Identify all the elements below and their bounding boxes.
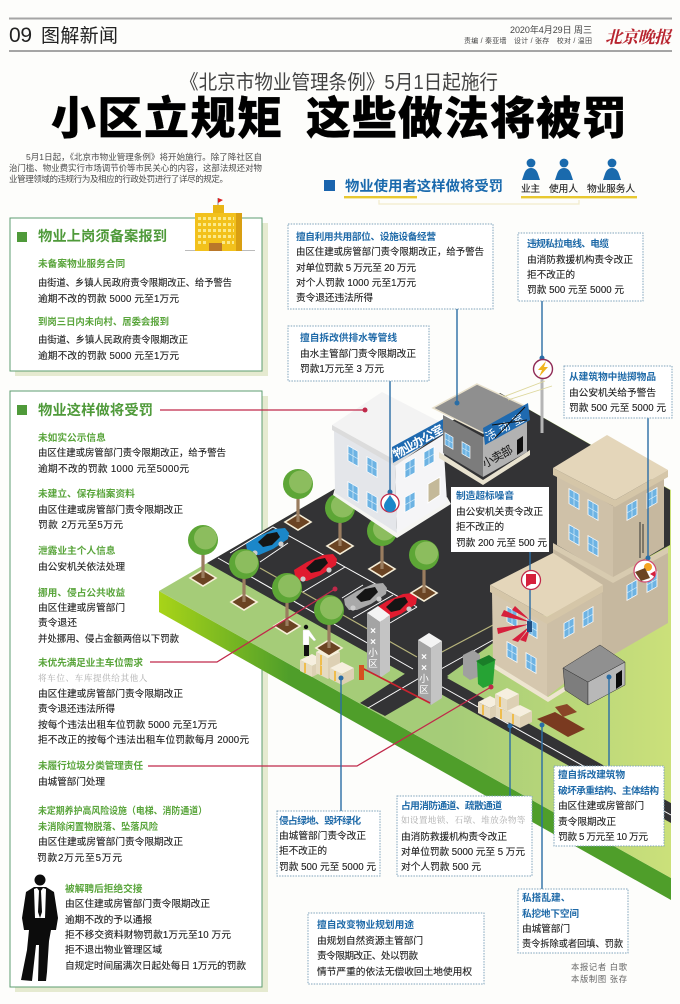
panel: property penalties: 责令退还违法所得 (38, 702, 115, 715)
date and editors: 2020年4月29日 周三 (510, 24, 592, 35)
panel: property penalties: 未建立、保存档案资料 (38, 487, 135, 500)
panel: property penalties: 泄露业主个人信息 (38, 544, 116, 557)
callout: fire lanes: 对个人罚款 500 元 (401, 860, 481, 873)
callout: shared areas (288, 224, 493, 309)
panel: property penalties: 拒不退出物业管理区域 (65, 943, 162, 956)
callout: green space: 由城管部门责令改正 (279, 829, 366, 842)
callout: thrown objects: 从建筑物中抛掷物品 (569, 370, 656, 383)
callout: shared areas: 责令退还违法所得 (296, 291, 373, 304)
callout: shared areas: 对单位罚款 5 万元至 20 万元 (296, 261, 416, 274)
callout: structural changes: 擅自拆改建筑物 (558, 768, 625, 781)
gate pillar right: 小 (419, 674, 429, 685)
utility pole and wires (503, 378, 552, 433)
callout: thrown objects: 由公安机关给予警告 (569, 386, 656, 399)
intro paragraph: 5月1日起，《北京市物业管理条例》将开始施行。除了降社区自 (26, 152, 262, 162)
main title (51, 93, 627, 144)
callout: thrown objects: 罚款 500 元至 5000 元 (569, 401, 666, 414)
callout: water pipes: 罚款1万元至 3 万元 (300, 362, 384, 375)
isometric community scene (159, 378, 671, 900)
callout: green space: 罚款 500 元至 5000 元 (279, 860, 376, 873)
callout: structural changes: 由区住建或房管部门 (558, 799, 644, 812)
gate pillar left (367, 606, 390, 678)
callout: illegal construction (518, 889, 628, 953)
callout: noise (451, 487, 549, 552)
panel: property penalties: 被解聘后拒绝交接 (65, 882, 143, 895)
callout: private wiring: 由消防救援机构责令改正 (527, 253, 633, 266)
section number and name (9, 24, 118, 47)
icon: user: 使用人 (549, 182, 578, 195)
panel: property penalties: 由公安机关依法处理 (38, 560, 125, 573)
callout: structural changes (554, 766, 664, 846)
gate pillar right (418, 633, 442, 705)
callout: structural changes: 罚款 5 万元至 10 万元 (558, 830, 648, 843)
trash bins (463, 650, 496, 688)
header bar (9, 18, 673, 52)
stacked boxes by the lawn (300, 646, 354, 685)
callout: noise: 拒不改正的 (456, 520, 504, 533)
gate pillar left: 区 (368, 659, 378, 670)
panel: property penalties: 由城管部门处理 (38, 775, 105, 788)
callout: land use change: 擅自改变物业规划用途 (317, 918, 414, 931)
panel: property penalties: 未消除闲置物脱落、坠落风险 (38, 820, 158, 833)
intro paragraph (9, 152, 262, 184)
callout: private wiring: 拒不改正的 (527, 268, 575, 281)
callout: land use change: 由规划自然资源主管部门 (317, 934, 423, 947)
main title: 这些做法将被罚 (306, 93, 627, 144)
panel: property registration (10, 218, 268, 376)
panel: property registration: 由街道、乡镇人民政府责令限期改正 (38, 333, 188, 346)
panel: property penalties: 未优先满足业主车位需求 (38, 656, 143, 669)
icon: property staff (587, 159, 635, 195)
panel: property penalties: 未定期养护高风险设施（电梯、消防通道） (38, 804, 207, 817)
panel: property penalties: 罚款2万元至5万元 (37, 851, 122, 864)
callout: fire lanes (397, 796, 532, 876)
icon: thrown objects (634, 560, 656, 582)
panel: property penalties: 拒不移交资料财物罚款1万元至10 万元 (65, 928, 231, 941)
person figure (303, 625, 316, 656)
icon: user (549, 159, 578, 195)
panel: property penalties: 物业这样做将受罚 (38, 401, 153, 419)
panel: property penalties: 由区住建或房管部门责令限期改正，给予警告 (38, 446, 226, 459)
icon: silhouette of a man in a suit (21, 874, 58, 981)
icon: noise flag (522, 570, 540, 590)
callout: fire lanes: 占用消防通道、疏散通道 (401, 799, 502, 812)
shop sign crossed out: 活动室 (483, 411, 526, 444)
panel: property penalties: 将车位、车库提供给其他人 (38, 672, 148, 684)
panel: property penalties: 逾期不改的予以通报 (65, 913, 152, 926)
red leader lines (148, 408, 494, 766)
panel: property penalties (10, 391, 268, 992)
callout: fire lanes: 对单位罚款 5000 元至 5 万元 (401, 845, 525, 858)
callout: shared areas: 擅自利用共用部位、设施设备经营 (296, 230, 436, 243)
callout: structural changes: 责令限期改正 (558, 815, 616, 828)
callout: water pipes (288, 326, 429, 381)
callout: shared areas: 对个人罚款 1000 元至1万元 (296, 276, 416, 289)
tree row (283, 469, 439, 601)
office sign: 物业办公室 (390, 421, 446, 462)
callout: noise: 罚款 200 元至 500 元 (456, 536, 547, 549)
panel: property registration: 到岗三日内未向村、居委会报到 (38, 315, 169, 328)
stacked boxes by the road (478, 688, 532, 728)
car: red (294, 554, 337, 582)
credits: 本报记者 白歌 (571, 962, 628, 972)
front block (490, 553, 603, 702)
panel: property penalties: 责令退还 (38, 616, 77, 629)
barrier gate (359, 665, 430, 703)
panel: property penalties: 罚款 2万元至5万元 (38, 518, 123, 531)
callout: illegal construction: 由城管部门 (522, 922, 570, 935)
section heading: property users: 物业使用者这样做将受罚 (345, 177, 503, 195)
intro paragraph: 业管理领域的违规行为及相应的行政处罚进行了详尽的规定。 (9, 174, 228, 184)
icon: owner (521, 159, 540, 195)
icon: property staff: 物业服务人 (587, 182, 635, 195)
panel: property registration: 物业上岗须备案报到 (38, 227, 167, 245)
panel: property registration: 未备案物业服务合同 (38, 257, 125, 270)
gate pillar left: × (370, 637, 376, 648)
credits: 本版制图 张存 (571, 974, 627, 984)
callout: green space: 拒不改正的 (279, 844, 327, 857)
car: red, near gate (374, 593, 417, 621)
panel: property penalties: 挪用、侵占公共收益 (38, 586, 125, 599)
credits (571, 962, 628, 984)
callout: land use change: 情节严重的依法无偿收回土地使用权 (317, 965, 472, 978)
icon: yellow office building (185, 198, 255, 251)
panel: property penalties: 逾期不改的罚款 1000 元至5000元 (38, 462, 189, 475)
icon: owner: 业主 (521, 183, 540, 195)
panel: property penalties: 由区住建或房管部门责令限期改正 (38, 687, 183, 700)
callout: land use change (308, 913, 484, 984)
callout: water pipes: 由水主管部门责令限期改正 (300, 347, 416, 360)
panel: property penalties: 未履行垃圾分类管理责任 (38, 759, 143, 772)
callout: private wiring (518, 233, 643, 301)
date and editors: 责编 / 秦亚墙 设计 / 张存 校对 / 温田 (464, 36, 592, 45)
callout: illegal construction: 私搭乱建、 (522, 891, 570, 904)
panel: property registration: 由街道、乡镇人民政府责令限期改正、给予警告 (38, 276, 232, 289)
shed: grey storage (563, 645, 625, 705)
callout: noise: 制造超标噪音 (456, 489, 514, 502)
tree row front (188, 525, 344, 656)
panel: property registration: 逾期不改的罚款 5000 元至1万元 (38, 292, 179, 305)
panel: property penalties: 由区住建或房管部门责令限期改正 (38, 835, 183, 848)
subtitle: 《北京市物业管理条例》5月1日起施行 (180, 71, 498, 94)
gate pillar right: × (421, 652, 427, 663)
section heading: property users (324, 177, 637, 204)
asphalt roads and car park (207, 393, 671, 823)
newspaper logo: 北京晚报 (605, 23, 673, 48)
callout: land use change: 责令限期改正、处以罚款 (317, 949, 418, 962)
callout: green space (277, 811, 380, 876)
section number and name: 图解新闻 (41, 25, 118, 47)
intro paragraph: 治门槛、物业费实行市场调节价等市民关心的内容，这部法规还对物 (9, 163, 262, 173)
callout: fire lanes: 由消防救援机构责令改正 (401, 830, 507, 843)
callout: private wiring: 罚款 500 元至 5000 元 (527, 283, 624, 296)
gate pillar right: 区 (419, 685, 429, 696)
icon: lightning (534, 360, 552, 378)
car: blue (246, 528, 289, 556)
callout: green space: 侵占绿地、毁坏绿化 (279, 814, 361, 827)
panel: property registration: 逾期不改的罚款 5000 元至1万元 (38, 349, 179, 362)
callout: private wiring: 违规私拉电线、电缆 (527, 237, 609, 250)
callout: illegal construction: 责令拆除或者回填、罚款 (522, 937, 623, 950)
date and editors (464, 24, 592, 45)
building: white property office (332, 392, 451, 538)
panel: property penalties: 由区住建或房管部门责令限期改正 (38, 503, 183, 516)
parking and lane markings (218, 527, 671, 815)
excavation pits (537, 704, 585, 737)
building: tan residential (490, 435, 668, 702)
car: grey (344, 583, 387, 611)
gate pillar left: × (370, 626, 376, 637)
gate pillar right: × (421, 663, 427, 674)
callout: water pipes: 擅自拆改供排水等管线 (300, 331, 397, 344)
callout: illegal construction: 私挖地下空间 (522, 907, 579, 920)
panel: property penalties: 由区住建或房管部门责令限期改正 (65, 897, 210, 910)
panel: property penalties: 拒不改正的按每个违法出租车位罚款每月 2000元 (38, 733, 249, 746)
callout: fire lanes: 如设置地锁、石墩、堆放杂物等 (401, 814, 526, 826)
building: grey shop: 小卖部 (480, 442, 515, 471)
icon: water drop (381, 494, 399, 512)
icon: noise rays and speaker (497, 606, 532, 642)
main title: 小区立规矩 (51, 93, 282, 144)
callout: noise: 由公安机关责令改正 (456, 505, 543, 518)
panel: property penalties: 由区住建或房管部门 (38, 601, 125, 614)
building: grey shop (433, 384, 530, 485)
lawn base (159, 393, 671, 900)
panel: property penalties: 按每个违法出租车位罚款 5000 元至1万元 (38, 718, 217, 731)
panel: property penalties: 并处挪用、侵占金额两倍以下罚款 (38, 632, 179, 645)
callout: thrown objects (564, 366, 672, 418)
gate pillar left: 小 (368, 648, 378, 659)
panel: property penalties: 自规定时间届满次日起处每日 1万元的罚款 (65, 959, 246, 972)
callout: structural changes: 破坏承重结构、主体结构 (558, 784, 659, 797)
section number and name: 09 (9, 24, 32, 47)
blue leader lines (338, 301, 650, 889)
callout: shared areas: 由区住建或房管部门责令限期改正，给予警告 (296, 245, 484, 258)
panel: property penalties: 未如实公示信息 (38, 431, 106, 444)
